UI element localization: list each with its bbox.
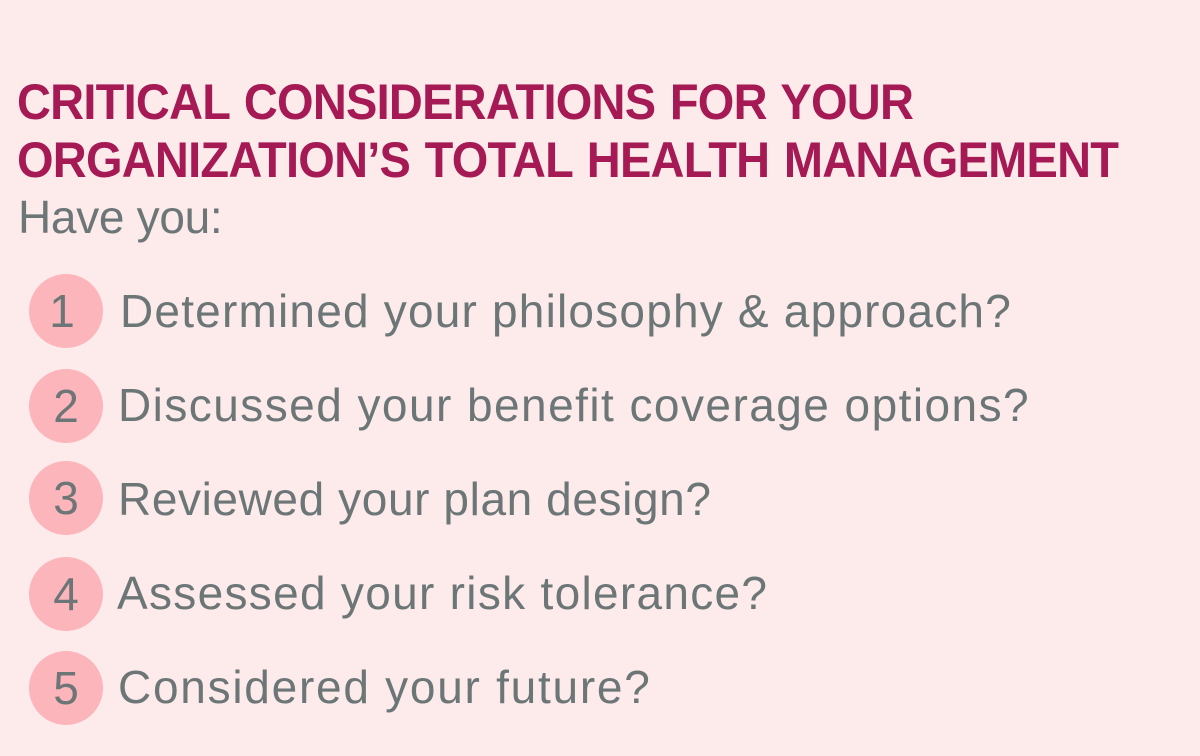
number badge 1 xyxy=(29,274,103,348)
number badge 5: 5 xyxy=(53,662,79,714)
item text 2: Discussed your benefit coverage options? xyxy=(118,379,1030,431)
list item 5 xyxy=(29,651,652,725)
number badge 1: 1 xyxy=(49,285,75,337)
title xyxy=(17,73,1118,188)
item text 4: Assessed your risk tolerance? xyxy=(117,567,768,619)
number badge 2 xyxy=(29,369,103,443)
number badge 4 xyxy=(29,557,103,631)
item text 5: Considered your future? xyxy=(118,661,652,713)
number badge 5 xyxy=(29,651,103,725)
list item 1 xyxy=(29,274,1012,348)
number badge 2: 2 xyxy=(53,380,79,432)
item text 1: Determined your philosophy & approach? xyxy=(120,285,1012,337)
list item 4 xyxy=(29,557,768,631)
title: CRITICAL CONSIDERATIONS FOR YOUR xyxy=(17,73,913,130)
list item 2 xyxy=(29,369,1030,443)
item text 3: Reviewed your plan design? xyxy=(118,473,712,525)
number badge 3: 3 xyxy=(53,472,79,524)
subheading: Have you: xyxy=(18,191,222,243)
number badge 3 xyxy=(29,461,103,535)
list item 3 xyxy=(29,461,712,535)
number badge 4: 4 xyxy=(53,568,79,620)
title: ORGANIZATION’S TOTAL HEALTH MANAGEMENT xyxy=(17,131,1118,188)
